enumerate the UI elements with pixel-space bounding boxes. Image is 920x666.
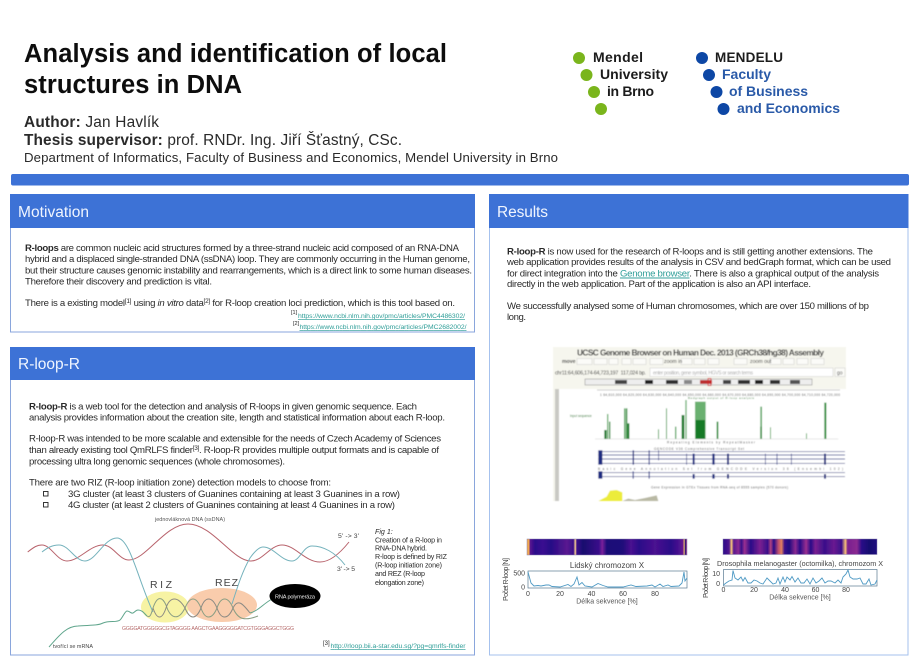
logo: MENDELU Faculty of Business and Economics: Faculty	[722, 66, 771, 82]
axes: Drosophila: Počet R-loop [N]	[703, 558, 710, 598]
strand: forming mRNA	[49, 599, 272, 647]
strand: ssDNA red	[28, 524, 349, 562]
heading: results: Results	[497, 204, 548, 221]
track: gene expression	[598, 490, 658, 501]
axes: human: 80	[651, 591, 659, 598]
browser navigation: chr11:64,606,174-64,723,197 117,024 bp.	[555, 370, 646, 376]
figure caption: RNA-DNA hybrid.	[375, 544, 427, 552]
figure caption: and REZ (R-loop	[375, 570, 425, 578]
text: R-loop-R description: There are two RIZ (R-loop initiation zone) detection models to choose from:	[29, 478, 331, 488]
browser title: UCSC Genome Browser on Human Dec. 2013 (GRCh38/hg38) Assembly	[577, 348, 824, 358]
panel: R-loop-R	[10, 347, 475, 655]
axes: human: Délka sekvence [%]	[576, 598, 638, 606]
text: motivation body: Therefore their discovery and prediction is vital.	[25, 276, 212, 288]
axes: human: 60	[619, 591, 627, 598]
browser navigation	[555, 358, 845, 376]
text: R-loop-R description: analysis provides information about the creation site, length and statistical information about each R-loop.	[29, 412, 445, 424]
browser navigation: zoom in	[664, 359, 682, 365]
title: structures in DNA	[24, 71, 242, 99]
author and affiliation block: Author: Jan Havlík	[24, 114, 159, 131]
figure caption: elongation zone)	[375, 579, 424, 587]
line plot: Drosophila	[724, 570, 877, 586]
diagram labels: tvořící se mRNA	[53, 644, 93, 650]
track ruler: 1 64,610,000 64,620,000 64,630,000 64,640,000 64,650,000 64,660,000 64,670,000 64,680,000 64,690,000 64,700,000 64,710,000 64,720,000	[600, 393, 840, 397]
axes: Drosophila: 60	[812, 587, 819, 594]
text: R-loop-R description: . R-loop-R provides multiple output formats and is capable of	[199, 445, 439, 456]
axes: Drosophila	[703, 558, 850, 602]
references 1 and 2: [1]	[291, 310, 298, 316]
text: results body: directly in the web application. Part of the application is also an API interface.	[507, 279, 811, 290]
checklist of detection models: 3G cluster (at least 3 clusters of Guanines containing at least 3 Guanines in a row)	[68, 489, 400, 500]
diagram labels: 5' -> 3'	[338, 533, 359, 540]
track: captions	[570, 414, 843, 490]
panel: results	[489, 194, 908, 655]
text: R-loop-R description: processing ultra long genomic sequences (whole chromosomes).	[29, 456, 285, 468]
track: gene models	[598, 450, 845, 479]
figure caption	[375, 528, 448, 587]
diagram labels	[53, 517, 359, 650]
checklist of detection models	[44, 489, 400, 511]
axes: Drosophila: 0	[716, 581, 720, 588]
screenshot: UCSC Genome Browser	[553, 347, 846, 501]
logo: MENDELU Faculty of Business and Economics	[696, 50, 840, 116]
chart title: Drosophila: Drosophila melanogaster (octomilka), chromozom X	[717, 559, 883, 568]
title: Analysis and identification of local	[24, 40, 447, 68]
title	[24, 40, 447, 99]
RNA polymerase: RNA polymeráza	[275, 594, 316, 600]
heatmap: Drosophila	[723, 539, 877, 554]
author and affiliation block	[24, 114, 558, 165]
axes: Drosophila: 10	[712, 571, 720, 578]
heading: motivation: Motivation	[18, 204, 89, 221]
text: motivation body: There is a existing model	[25, 298, 125, 309]
text: R-loop-R description: R-loop-R is a web tool for the detection and analysis of R-loops in given genomic sequence. Each	[29, 402, 417, 412]
text: results body: R-loop-R is now used for the research of R-loops and is still getting another extensions. The	[507, 246, 873, 258]
diagram labels: GGGGATGGGGGCGTAGGGG AAGCTGAAGGGGGATCGTGGGAGGCTGGG	[122, 626, 294, 632]
figure caption: Creation of a R-loop in	[375, 536, 442, 544]
axes: Drosophila: 40	[781, 587, 789, 594]
browser navigation: enter position, gene symbol, HGVS or search terms	[653, 370, 754, 376]
track ruler: Bedgraph output of R-loop analysis	[688, 396, 754, 400]
reference 3: http://rloop.bii.a-star.edu.sg/?pg=qmrlfs-finder	[330, 643, 466, 650]
helix in RNA-DNA hybrid	[147, 599, 258, 619]
diagram: R-loop formation	[28, 517, 359, 650]
text: results body	[506, 246, 891, 323]
chart: Drosophila chromosome X	[703, 539, 883, 602]
panel: motivation	[10, 194, 475, 332]
chromosome ideogram	[585, 378, 812, 386]
logo: Mendel University in Brno: in Brno	[607, 83, 654, 99]
references 1 and 2: https://www.ncbi.nlm.nih.gov/pmc/articles/PMC4486302/	[298, 313, 465, 320]
axes: Drosophila: 20	[750, 587, 758, 594]
line plot: human	[528, 571, 687, 588]
text: results body: web application provides results of the analysis in CSV and bedGraph format, which can be used	[506, 257, 891, 268]
logo: Mendel University in Brno	[573, 49, 668, 115]
track: captions: Basic Gene Annotation Set from GENCODE Version 36 (Ensembl 102)	[598, 467, 843, 471]
author and affiliation block: Thesis supervisor: prof. RNDr. Ing. Jiří Šťastný, CSc.	[24, 132, 402, 149]
diagram labels: jednovláknová DNA (ssDNA)	[154, 517, 225, 523]
text: motivation body: but their structure causes genomic instability and rearrangements, which is a direct link to some human diseases.	[25, 266, 472, 276]
axes: human: 0	[526, 591, 530, 598]
chart title: human: Lidský chromozom X	[570, 561, 645, 570]
axes: Drosophila: Délka sekvence [%]	[769, 594, 831, 602]
diagram labels: REZ	[215, 577, 239, 589]
logo: MENDELU Faculty of Business and Economics: and Economics	[737, 100, 840, 116]
text: motivation body	[25, 243, 472, 309]
chart: human chromosome X	[503, 539, 687, 606]
figure caption: Fig 1:	[375, 528, 393, 536]
track: captions: Gene Expression in GTEx Tissues from RNA-seq of 8555 samples (570 donors)	[651, 486, 788, 490]
text: results body: We successfully analysed some of Human chromosomes, which are over 150 millions of bp	[507, 301, 869, 312]
text: motivation body: [1]	[125, 298, 132, 305]
text: results body: long.	[507, 312, 526, 323]
browser navigation: go	[837, 370, 843, 376]
text: motivation body: [2]	[204, 298, 210, 305]
browser navigation: move	[562, 359, 576, 365]
references 1 and 2: https://www.ncbi.nlm.nih.gov/pmc/articles/PMC2682002/	[300, 324, 467, 331]
text: motivation body: R-loops are common nucleic acid structures formed by a three-strand nucleic acid composed of an RNA-DNA	[25, 243, 460, 254]
track: captions: Repeating Elements by RepeatMasker	[667, 440, 756, 444]
references 1 and 2	[291, 310, 467, 331]
diagram labels: RIZ	[150, 579, 173, 591]
axes: human: 500	[513, 570, 525, 578]
figure caption: R-loop is defined by RIZ	[375, 553, 448, 561]
top divider bar	[11, 174, 909, 186]
track: captions: Input sequence	[570, 414, 592, 418]
heading: R-loop-R: R-loop-R	[18, 356, 80, 373]
logo: Mendel University in Brno: Mendel	[593, 49, 643, 65]
text: motivation body: in vitro data	[158, 298, 204, 309]
axes: human: 20	[556, 591, 564, 598]
axes: human	[503, 558, 659, 606]
axes: Drosophila: 0	[722, 587, 726, 594]
axes: human: 40	[588, 591, 595, 598]
heatmap: human	[527, 539, 687, 555]
reference 3: [3]	[323, 641, 330, 647]
track: green signal bars	[595, 400, 838, 439]
author and affiliation block: Department of Informatics, Faculty of Business and Economics, Mendel University in Brno	[24, 150, 558, 165]
strand: template blue	[42, 538, 345, 612]
text: results body: for direct integration into the Genome browser. There is also a graphical output of the analysis	[507, 268, 879, 280]
RNA polymerase	[270, 584, 320, 608]
browser navigation: zoom out	[750, 359, 772, 365]
text: R-loop-R description	[29, 402, 445, 488]
axes: human: 0	[521, 584, 525, 592]
text: motivation body: hybrid and a displaced single-stranded DNA (ssDNA) loop. They are commonly occurring in the Human genome,	[25, 254, 470, 265]
text: R-loop-R description: R-loop-R was intended to be more scalable and extensible for the needs of Czech Academy of Sciences	[29, 434, 441, 444]
text: motivation body: for R-loop creation loci prediction, which is this tool based on.	[210, 298, 455, 309]
references 1 and 2: [2]	[293, 321, 300, 327]
text: R-loop-R description: than already existing tool QmRLFS finder	[29, 445, 193, 456]
logo: MENDELU Faculty of Business and Economics: MENDELU	[715, 50, 783, 65]
left sidebar of tracks	[555, 389, 559, 501]
checklist of detection models: 4G cluster (at least 2 clusters of Guanines containing at least 4 Guanines in a row)	[68, 500, 395, 511]
logo: Mendel University in Brno: University	[600, 66, 668, 82]
logo: MENDELU Faculty of Business and Economics: of Business	[729, 83, 808, 99]
axes: Drosophila: 80	[842, 587, 850, 594]
figure caption: (R-loop initiation zone)	[375, 562, 442, 570]
text: motivation body: using	[131, 298, 158, 309]
axes: human: Počet R-loop [N]	[503, 558, 510, 601]
track ruler	[597, 390, 840, 400]
diagram labels: 3' -> 5	[337, 566, 355, 573]
text: R-loop-R description: [3]	[193, 445, 200, 452]
track: captions: GENCODE V36 Comprehensive Transcript Set	[654, 447, 744, 451]
